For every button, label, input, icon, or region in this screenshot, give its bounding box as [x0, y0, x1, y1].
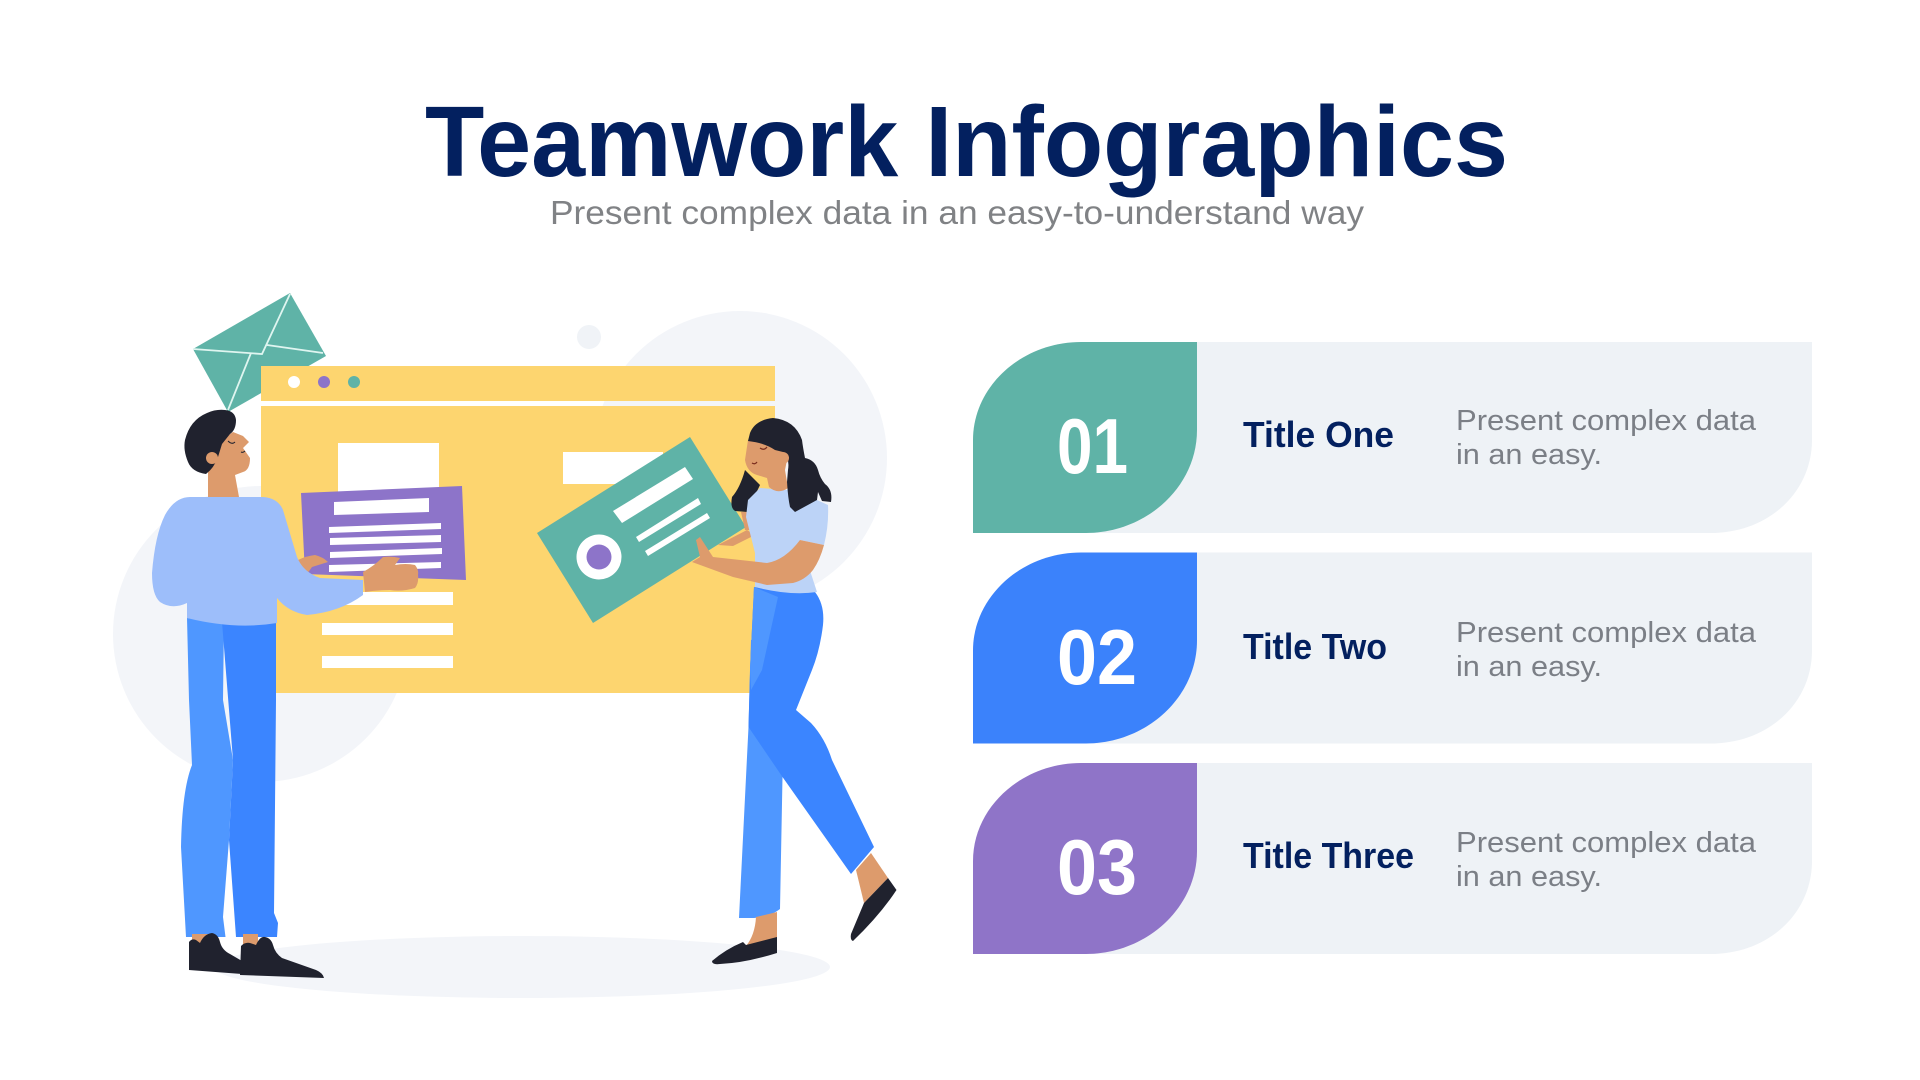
background circle right: [593, 311, 887, 605]
card 3 description: Present complex data: [1456, 827, 1757, 859]
card 1 description: in an easy.: [1456, 439, 1602, 471]
browser window: [261, 366, 775, 693]
woman front shoe: [851, 878, 896, 941]
man pale leg: [181, 618, 233, 937]
subtitle: Present complex data in an easy-to-understand way: [550, 194, 1365, 231]
woman shirt: [746, 488, 828, 593]
card 1 title: Title One: [1243, 414, 1394, 455]
woman near arm: [692, 537, 824, 585]
card 1 badge: [973, 342, 1197, 533]
icon: envelope: [193, 293, 326, 412]
background small circle: [577, 325, 601, 349]
woman eyes and mouth: [752, 447, 767, 464]
man hair: [184, 410, 236, 474]
card 3 number: 03: [1057, 823, 1137, 911]
illustration: teamwork scene: [113, 293, 896, 998]
woman back shoe: [712, 937, 777, 964]
man small hand: [298, 555, 328, 574]
card 2 title: Title Two: [1243, 626, 1387, 667]
card 2 number: 02: [1057, 613, 1137, 701]
card 2 description: Present complex data: [1456, 617, 1757, 649]
teal card: [537, 437, 746, 623]
card 1 background: [1090, 342, 1812, 533]
woman pants highlight: [750, 587, 778, 690]
man sweater: [152, 497, 363, 626]
man eye and mouth: [228, 441, 245, 452]
man figure: [152, 410, 418, 978]
woman top pants: [748, 587, 874, 874]
card 3 description: in an easy.: [1456, 861, 1602, 893]
card 1 number: 01: [1057, 402, 1128, 490]
man dark leg: [222, 620, 278, 937]
background circle left: [113, 486, 409, 782]
woman front ankle: [856, 853, 888, 903]
card 3: [973, 763, 1812, 954]
card 3 title: Title Three: [1243, 835, 1414, 876]
ground shadow: [214, 936, 830, 998]
man big hand: [363, 557, 418, 592]
card 1 description: Present complex data: [1456, 405, 1757, 437]
woman far arm: [718, 512, 755, 546]
man ankles: [192, 934, 258, 948]
purple card: [301, 486, 466, 580]
card 2 background: [1090, 552, 1812, 744]
woman figure: [692, 418, 896, 964]
man neck and face: [208, 432, 250, 497]
woman ear: [777, 452, 789, 464]
woman hair: [748, 418, 831, 512]
woman face and neck: [745, 430, 790, 491]
woman back leg: [739, 640, 790, 918]
card 3 badge: [973, 763, 1197, 954]
man ear: [206, 452, 218, 464]
man front shoe: [240, 937, 324, 978]
woman back ankle: [746, 912, 777, 946]
card 3 background: [1090, 763, 1812, 954]
card 2: [973, 552, 1812, 744]
card 1: [973, 342, 1812, 533]
title: Teamwork Infographics: [425, 86, 1508, 198]
man back shoe: [189, 933, 242, 974]
card 2 description: in an easy.: [1456, 651, 1602, 683]
woman back hair: [731, 470, 760, 512]
card 2 badge: [973, 552, 1197, 744]
